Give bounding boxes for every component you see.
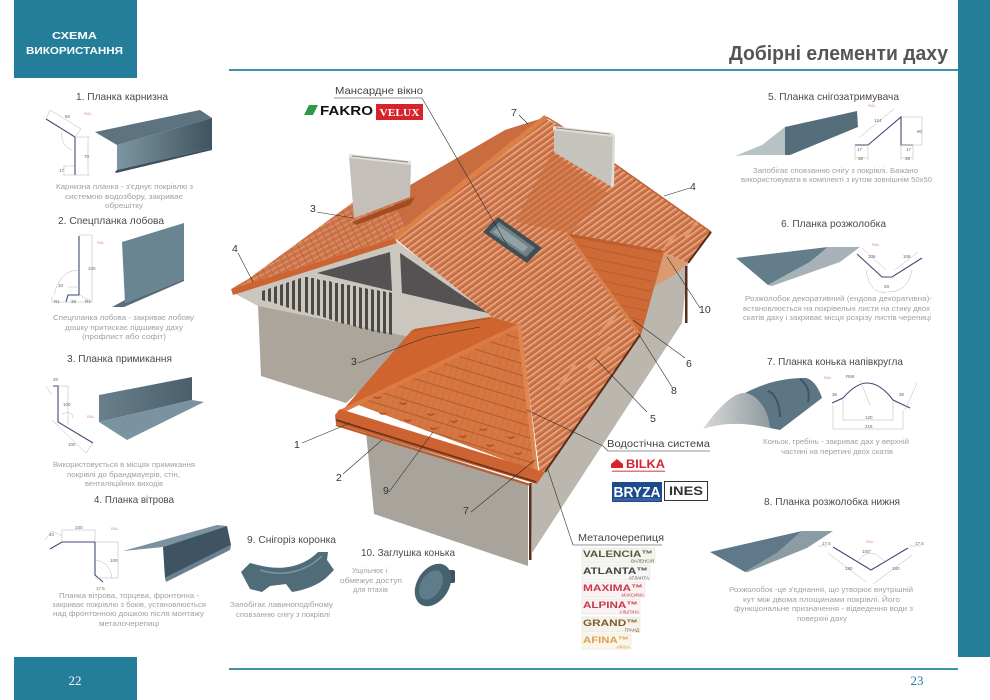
main roof slope: [397, 119, 711, 475]
panel: 10 ridge end cap: 10. Заглушка конька: [361, 547, 455, 559]
product 3: [99, 377, 204, 440]
diagram 3: 100: [68, 442, 76, 447]
roof window label and logos: [304, 85, 507, 245]
callout 9: [383, 432, 433, 497]
diagram 6: 106: [903, 254, 911, 259]
product 9: [241, 552, 334, 592]
diagram 7: [824, 374, 917, 429]
diagram 8: 17.5: [915, 541, 924, 546]
panel: 2 fascia flashing: [52, 215, 194, 341]
right chimney: [553, 126, 615, 188]
diagram 3: [46, 377, 96, 453]
panel: 2 fascia flashing: дошку притискає підшивку даху: [65, 323, 183, 332]
logo: Alpina: [582, 599, 640, 614]
panel: 5 snow guard flashing: використовувати в комплекті з кутом зовнішнім 50х50: [741, 175, 932, 184]
panel: 5 snow guard flashing: Запобігає сповзанню снігу з покрівлі. Бажано: [753, 166, 918, 175]
skylight: [483, 217, 542, 263]
logo: FAKRO: FAKRO: [320, 104, 373, 118]
panel: 3 abutment flashing: покрівлі до брандмауерів, стін,: [67, 470, 180, 479]
callout 5: [595, 358, 656, 425]
logo: Afina: АФІНА: [616, 644, 630, 650]
diagram 8: 180: [892, 566, 900, 571]
diagram 8: 180: [845, 566, 853, 571]
logo: Maxima: МАКСИМА: [621, 592, 644, 598]
panel: 9 snow guard crown: 9. Снігоріз коронка: [247, 534, 336, 546]
drainage label and logos: [527, 410, 710, 502]
diagram 7: 120: [865, 415, 873, 420]
logo: Alpina: АЛЬПІНА: [619, 610, 639, 614]
diagram 5: RAL: [868, 103, 877, 108]
diagram 5: [855, 103, 923, 161]
header tab: ВИКОРИСТАННЯ: [26, 45, 123, 57]
panel: 8 lower valley flashing: кут між двома площинами покрівлі. Його: [743, 595, 900, 604]
ridge strip: [395, 117, 546, 238]
callout 7 top: 7: [511, 107, 517, 119]
callout 4 left: [232, 243, 253, 282]
panel: 2 fascia flashing: Спецпланка лобова - закриває лобову: [53, 313, 194, 322]
callout 4 right: [664, 181, 696, 196]
diagram 2: [52, 235, 106, 304]
panel: 9 snow guard crown: Запобігає лавиноподібному: [230, 600, 333, 609]
diagram 6: 28: [884, 284, 890, 289]
gutter on main slope: [545, 232, 711, 472]
panel: 4 wind flashing: закриває покрівлю з боків, установлюється: [52, 600, 206, 609]
diagram 6: RAL: [872, 242, 881, 247]
diagram 3: 100: [63, 402, 71, 407]
logo: VELUX: VELUX: [380, 108, 420, 119]
diagram 5: 17: [857, 147, 863, 152]
footer: page 23: 23: [910, 673, 924, 688]
panel: 2 fascia flashing: 2. Спецпланка лобова: [58, 215, 164, 227]
product 2: [112, 223, 184, 307]
callout 2: 2: [336, 472, 342, 484]
diagram 2: RAL: [97, 240, 106, 245]
dormer: [568, 235, 688, 335]
logo: Valencia: [582, 548, 655, 564]
callout 5: 5: [650, 413, 656, 425]
panel: 8 lower valley flashing: Розжолобок -це з'єднання, що утворює внутрішній: [729, 585, 913, 594]
callout 3 upper: [310, 203, 353, 218]
house illustration: [231, 117, 711, 566]
callout 6: 6: [686, 358, 692, 370]
product 10: [407, 557, 459, 613]
callout 8: [638, 333, 677, 397]
roof snow guards: [374, 397, 521, 454]
diagram 5: 17: [906, 147, 912, 152]
diagram 3: 20: [53, 377, 59, 382]
logo: BILKA: [611, 457, 665, 472]
panel: 5 snow guard flashing: [735, 91, 932, 184]
diagram 7: 215: [865, 424, 873, 429]
panel: 4 wind flashing: над фронтонною дошкою після монтажу: [53, 609, 204, 618]
footer: page 22: 22: [68, 673, 82, 688]
diagram 4: 100: [110, 558, 118, 563]
callout 7 bottom: [463, 460, 535, 517]
diagram 2: R1: [85, 299, 91, 304]
panel: 10 ridge end cap: Ущільнює і: [352, 566, 387, 575]
callout 4 right: 4: [690, 181, 696, 193]
panel: 1 eaves flashing: [46, 91, 212, 210]
panel: 6 valley flashing: скатів даху і закриває місця розрізу листів черепиці: [743, 313, 931, 322]
panel: 8 lower valley flashing: 8. Планка розжолобка нижня: [764, 496, 900, 508]
diagram 1: 17: [59, 168, 65, 173]
callout 6: [633, 320, 692, 370]
logo: Atlanta: [582, 565, 650, 580]
panel: 10 ridge end cap: [340, 547, 459, 613]
logo: INES: [664, 482, 708, 500]
diagram 4: RAL: [111, 526, 120, 531]
logo: VELUX: [376, 104, 423, 120]
logo: Afina: AFINA™: [583, 635, 629, 646]
panel: 6 valley flashing: Розжолобок декоративний (ендова декоративна)-: [745, 294, 933, 303]
footer: page 22: [14, 657, 137, 700]
callout numbers and leader lines: [232, 107, 711, 517]
logo: FAKRO: [304, 104, 373, 118]
panel: 4 wind flashing: Планка вітрова, торцева, фронтонна -: [59, 591, 200, 600]
callout 4 left: 4: [232, 243, 238, 255]
logo: Atlanta: АТЛАНТА: [629, 576, 649, 580]
diagram 7: R68: [846, 374, 855, 379]
diagram 2: R1: [54, 299, 60, 304]
diagram 1: 70: [84, 154, 90, 159]
diagram 5: 38: [858, 156, 864, 161]
drainage label and logos: Водостічна система: [607, 438, 710, 450]
callout 3 lower: 3: [351, 356, 357, 368]
logo: Valencia: VALENCIA™: [583, 549, 653, 560]
panel: 8 lower valley flashing: поверхні даху: [797, 614, 847, 623]
right wall: [531, 257, 688, 553]
panel: 8 lower valley flashing: [710, 496, 924, 623]
logo: BILKA: BILKA: [626, 457, 665, 471]
header tab: [14, 0, 137, 78]
logo: Alpina: ALPINA™: [583, 600, 638, 611]
panel: 1 eaves flashing: Карнизна планка - з'єднує покрівлю з: [56, 182, 194, 191]
left chimney: [349, 154, 415, 225]
panel: 7 half-round ridge flashing: 7. Планка конька напівкругла: [767, 356, 903, 368]
logo: Atlanta: ATLANTA™: [583, 566, 648, 577]
callout 10: [667, 257, 711, 316]
metal tile label and product logos: [548, 470, 664, 650]
callout 3 upper: 3: [310, 203, 316, 215]
down pipes: [529, 266, 688, 560]
panel: 2 fascia flashing: (профлист або софіт): [82, 332, 167, 341]
logo: Grand: ГРАНД: [625, 628, 639, 632]
diagram 8: 17.5: [822, 541, 831, 546]
header tab: СХЕМА: [52, 30, 97, 42]
product 1: [95, 110, 212, 173]
title: Добірні елементи даху: [729, 43, 949, 65]
diagram 4: 100: [75, 525, 83, 530]
diagram 1: RAL: [84, 111, 93, 116]
callout 10: 10: [699, 304, 711, 316]
roof snow guard strips: [557, 222, 697, 390]
diagram 1: [46, 110, 93, 175]
diagram 5: 124: [874, 118, 882, 123]
panel: 3 abutment flashing: Використовується в місцях примикання: [53, 460, 195, 469]
diagram 6: [857, 242, 922, 292]
panel: 3 abutment flashing: вентиляційних виходів: [85, 479, 163, 488]
product 5: [735, 111, 858, 156]
right sidebar: [958, 0, 990, 657]
left roof slope: [231, 117, 546, 295]
front wall: [366, 432, 528, 566]
panel: 7 half-round ridge flashing: частині на перетині двох скатів: [781, 447, 893, 456]
diagram 4: 40: [49, 532, 55, 537]
logo: Valencia: ВАЛЕНСІЯ: [631, 558, 654, 564]
diagram 8: RAL: [866, 539, 875, 544]
logo: Afina: [582, 634, 631, 650]
panel: 1 eaves flashing: обрешітку: [105, 201, 143, 210]
diagram 4: 17.5: [96, 586, 105, 591]
panel: 1 eaves flashing: системою водозбору, закриває: [65, 192, 183, 201]
logo: INES: INES: [669, 486, 703, 498]
callout 8: 8: [671, 385, 677, 397]
callout 7 bottom: 7: [463, 505, 469, 517]
panel: 9 snow guard crown: [230, 534, 336, 619]
diagram 7: 36: [899, 392, 905, 397]
panel: 6 valley flashing: 6. Планка розжолобка: [781, 218, 886, 230]
panel: 6 valley flashing: встановлюється на покрівельні листи на стику двох: [743, 304, 930, 313]
panel: 1 eaves flashing: 1. Планка карнизна: [76, 91, 168, 103]
front hip roof: [335, 317, 545, 485]
callout 7 top: [511, 107, 528, 124]
panel: 4 wind flashing: 4. Планка вітрова: [94, 494, 174, 506]
diagram 1: 60: [65, 114, 71, 119]
logo: Maxima: [582, 582, 645, 598]
diagram 8: 100°: [862, 549, 872, 554]
logo: BRYZA: BRYZA: [614, 485, 661, 501]
diagram 6: 106: [868, 254, 876, 259]
callout 1: 1: [294, 439, 300, 451]
product 8: [710, 531, 833, 572]
panel: 10 ridge end cap: для птахів: [353, 585, 388, 594]
roof window label and logos: Мансардне вікно: [335, 85, 423, 97]
diagram 2: 100: [88, 266, 96, 271]
diagram 2: 38: [71, 299, 77, 304]
diagram 4: [45, 525, 120, 591]
diagram 8: [818, 539, 924, 584]
panel: 4 wind flashing: металочерепиці: [99, 619, 159, 628]
diagram 5: 90: [917, 129, 923, 134]
panel: 4 wind flashing: [45, 494, 231, 628]
callout 1: [294, 423, 350, 451]
gable soffit: [232, 240, 497, 337]
diagram 7: RAL: [824, 375, 833, 380]
diagram 3: RAL: [87, 414, 96, 419]
panel: 10 ridge end cap: обмежує доступ: [340, 576, 402, 585]
callout 9: 9: [383, 485, 389, 497]
callout 2: [336, 440, 382, 484]
panel: 7 half-round ridge flashing: [703, 356, 917, 456]
metal tile label and product logos: Металочерепиця: [578, 532, 664, 544]
logo: Grand: [582, 617, 640, 632]
panel: 8 lower valley flashing: функціональне призначення - відведення води з: [734, 604, 914, 613]
shaded area below chimney: [515, 152, 608, 233]
diagram 2: 10: [58, 283, 64, 288]
panel: 3 abutment flashing: [46, 353, 204, 488]
callout 3 lower: [351, 327, 480, 368]
left wall: [258, 305, 412, 403]
logo: Maxima: MAXIMA™: [583, 583, 643, 594]
panel: 9 snow guard crown: сповзанню снігу з покрівлі: [236, 610, 330, 619]
logo: Grand: GRAND™: [583, 618, 638, 629]
panel: 7 half-round ridge flashing: Коньок, гребінь - закриває дах у верхній: [763, 437, 909, 446]
product 7: [703, 378, 822, 430]
diagram 7: 36: [832, 392, 838, 397]
panel: 5 snow guard flashing: 5. Планка снігозатримувача: [768, 91, 899, 103]
panel: 3 abutment flashing: 3. Планка примикання: [67, 353, 172, 365]
panel: 6 valley flashing: [736, 218, 933, 322]
diagram 5: 38: [905, 156, 911, 161]
product 4: [123, 525, 231, 582]
product 6: [736, 247, 860, 286]
